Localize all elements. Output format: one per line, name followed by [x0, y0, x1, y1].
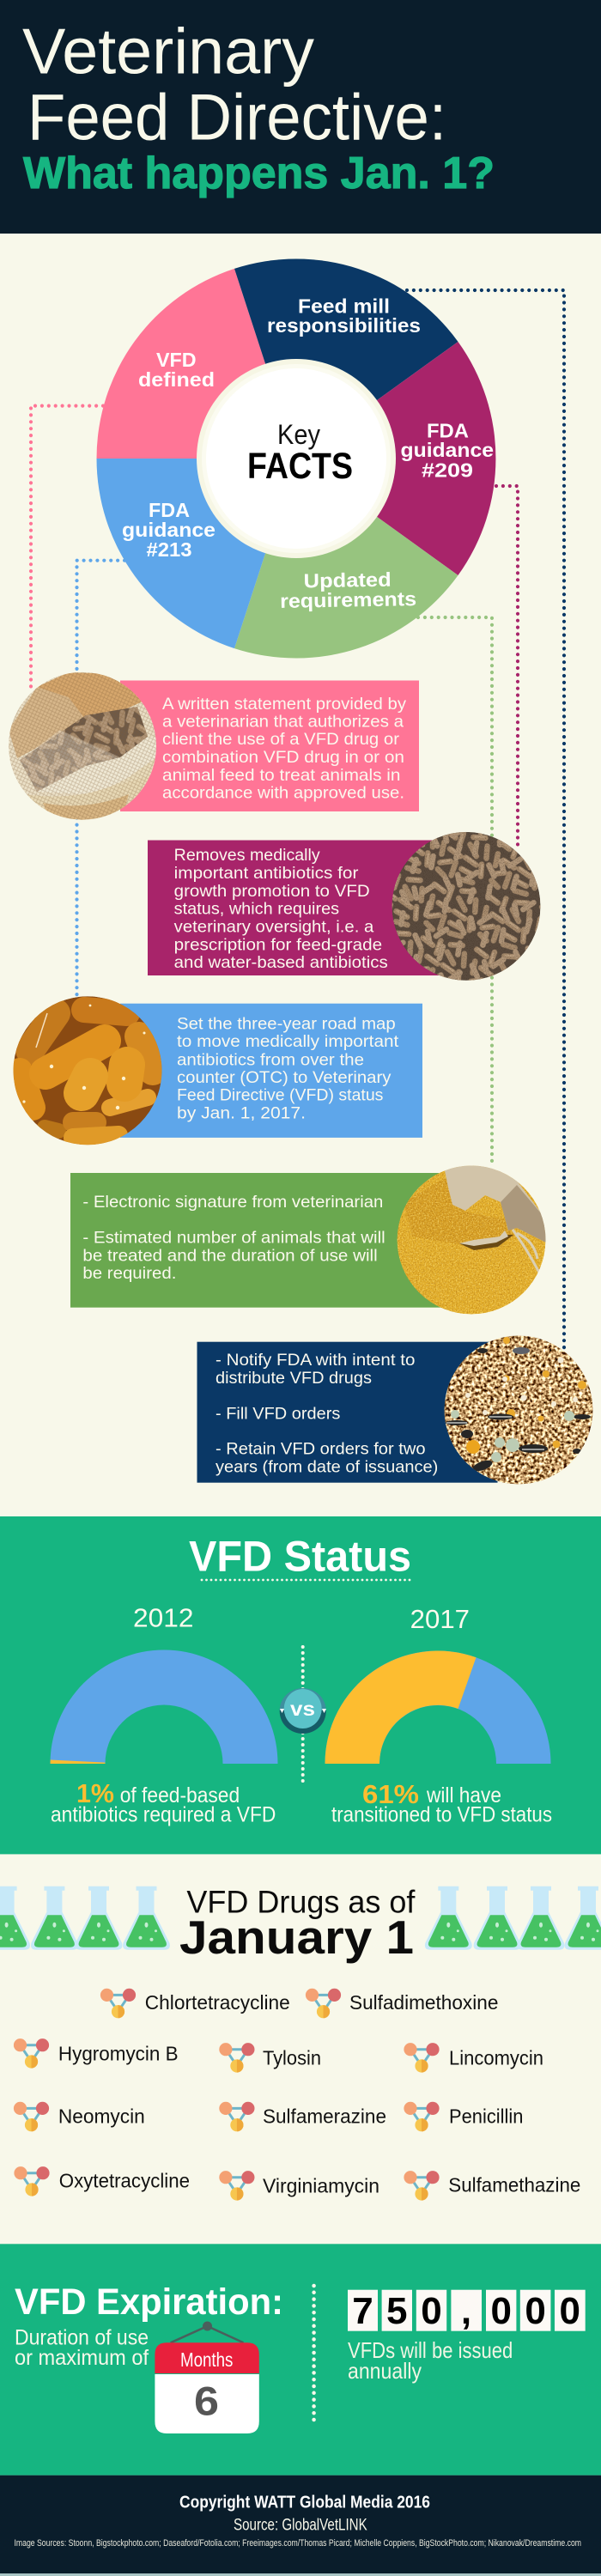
text: guidance 213 description: Feed Directive (VFD) status: [177, 1086, 384, 1105]
title: Feed Directive:: [27, 82, 446, 155]
label: 2012: 2012: [133, 1602, 194, 1632]
segment: feed mill responsibilities: [234, 258, 458, 459]
drug: Chlortetracycline: Chlortetracycline: [145, 1991, 290, 2014]
heading: VFD drugs as of January 1: January 1: [179, 1911, 414, 1964]
drug: Virginiamycin: [219, 2171, 379, 2201]
text: guidance 209 description: and water-based antibiotics: [174, 953, 388, 972]
panel: FDA guidance 213: [14, 996, 422, 1145]
caption: 2017: will have: [426, 1783, 501, 1807]
drug: Tylosin: Tylosin: [263, 2046, 321, 2069]
text: guidance 209 description: veterinary oversight, i.e. a: [174, 917, 373, 936]
caption: 2012: antibiotics required a VFD: [51, 1803, 276, 1827]
label: 2017: 2017: [410, 1604, 470, 1634]
chart: key facts donut: [96, 258, 495, 659]
text: VFD definition: animal feed to treat animals in: [162, 766, 400, 785]
panel: VFD expiration: [0, 2244, 601, 2476]
photo: burlap sack of pellets: [9, 672, 159, 824]
chart: 2012 half donut: [50, 1650, 278, 1764]
caption: 2012: [51, 1778, 276, 1827]
connector: navy dotted line: [407, 290, 564, 1348]
title: [22, 15, 446, 155]
connector: blue dotted line: [77, 561, 124, 996]
text: duration: [15, 2326, 149, 2370]
heading: VFD Status: VFD Status: [189, 1532, 411, 1580]
text: guidance 213 description: antibiotics from over the: [177, 1050, 364, 1069]
text: guidance 213 description: Set the three-year road map: [177, 1015, 396, 1034]
segment: VFD defined: [96, 269, 296, 459]
counter: 750,000: 0: [525, 2290, 546, 2332]
segment: FDA guidance 209: FDA: [427, 419, 469, 441]
text: guidance 209 description: important antibiotics for: [174, 864, 359, 883]
drug: Chlortetracycline: [100, 1989, 290, 2018]
drug: Lincomycin: Lincomycin: [449, 2046, 543, 2069]
heading: VFD drugs as of January 1: [179, 1884, 416, 1964]
chart: 2017 half donut: [325, 1650, 551, 1764]
drug: Penicillin: Penicillin: [449, 2105, 523, 2128]
panel: VFD status: [0, 1516, 601, 1854]
text: guidance 213 description: by Jan. 1, 2017.: [177, 1103, 306, 1122]
connector: pink dotted line: [31, 406, 103, 689]
segment: VFD defined: VFD: [156, 349, 197, 371]
text: guidance 213 description: to move medically important: [177, 1032, 399, 1051]
text: source: Source: GlobalVetLINK: [234, 2517, 367, 2535]
drug: Virginiamycin: Virginiamycin: [263, 2174, 379, 2196]
text: guidance 209 description: status, which requires: [174, 900, 339, 919]
segment: FDA guidance 213: #213: [146, 538, 192, 561]
text: guidance 209 description: prescription for feed-grade: [174, 935, 382, 954]
counter: 750,000: [348, 2290, 586, 2332]
drug: Hygromycin B: Hygromycin B: [58, 2042, 179, 2064]
panel: footer: [0, 2476, 601, 2576]
segment: FDA guidance 213: guidance: [122, 519, 216, 541]
heading: VFD Expiration: VFD Expiration:: [15, 2281, 283, 2323]
text: updated requirements list: [82, 1193, 385, 1283]
text: guidance 213 description: [177, 1015, 399, 1122]
icon: vs badge: vs: [290, 1698, 315, 1720]
caption: 2017: [331, 1779, 552, 1827]
icons: flasks left: [0, 1886, 170, 1950]
panel: feed mill responsibilities: [197, 1336, 592, 1484]
segment: updated requirements: [234, 459, 458, 659]
drug: Sulfamethazine: [404, 2171, 580, 2201]
drug: Oxytetracycline: [14, 2166, 190, 2196]
segment: updated requirements: Updated: [303, 568, 392, 592]
text: responsibilities list: [216, 1351, 438, 1477]
text: guidance 209 description: growth promotion to VFD: [174, 882, 370, 901]
segment: updated requirements: requirements: [280, 587, 416, 612]
subtitle: What happens Jan. 1?: [23, 149, 495, 198]
center label: key facts: FACTS: [247, 446, 353, 487]
text: responsibilities list: - Notify FDA with intent to: [216, 1351, 416, 1370]
counter: 750,000: 0: [421, 2290, 442, 2332]
photo: orange capsules: [14, 996, 161, 1145]
segment: FDA guidance 209: #209: [422, 459, 473, 482]
text: duration: Duration of use: [15, 2326, 149, 2350]
segment: FDA guidance 213: [96, 459, 296, 648]
icon: calendar 6 months: [155, 2322, 259, 2433]
icon: vs badge: [280, 1688, 326, 1734]
text: guidance 213 description: counter (OTC) to Veterinary: [177, 1068, 392, 1087]
drug: Sulfadimethoxine: [306, 1989, 498, 2018]
text: VFD definition: accordance with approved use.: [162, 783, 404, 802]
section: VFD drugs: [0, 1884, 601, 2201]
segment: VFD defined: defined: [138, 368, 215, 391]
text: copyright: Copyright WATT Global Media 2016: [179, 2494, 430, 2512]
heading: VFD drugs as of January 1: VFD Drugs as of: [186, 1884, 416, 1919]
panel: VFD defined: [9, 672, 419, 824]
drug: Tylosin: [219, 2043, 321, 2073]
text: updated requirements list: - Electronic signature from veterinarian: [82, 1193, 383, 1212]
panel: header: [0, 0, 601, 234]
counter: 750,000: 7: [352, 2290, 373, 2332]
counter: 750,000: 0: [490, 2290, 512, 2332]
segment: feed mill responsibilities: Feed mill: [298, 295, 390, 318]
text: responsibilities list: distribute VFD drugs: [216, 1369, 372, 1388]
icon: calendar 6 months: 6: [194, 2379, 219, 2424]
panel: FDA guidance 209: [148, 832, 541, 981]
text: responsibilities list: - Fill VFD orders: [216, 1404, 341, 1423]
text: guidance 209 description: [174, 846, 388, 972]
icons: flasks right: [425, 1886, 601, 1950]
text: updated requirements list: - Estimated number of animals that will: [82, 1228, 385, 1247]
segment: FDA guidance 209: [296, 342, 495, 575]
drug: Sulfamerazine: Sulfamerazine: [263, 2105, 386, 2128]
caption: 2012: 1%: [76, 1778, 114, 1808]
drug: Oxytetracycline: Oxytetracycline: [59, 2170, 190, 2192]
icon: calendar 6 months: Months: [180, 2348, 233, 2371]
segment: FDA guidance 209: guidance: [400, 439, 494, 461]
segment: FDA guidance 213: FDA: [149, 499, 190, 521]
photo: yellow cornmeal and sack: [397, 1163, 546, 1314]
text: VFDs issued annually: annually: [348, 2358, 422, 2384]
text: updated requirements list: be treated and the duration of use will: [82, 1246, 378, 1265]
drug: Sulfamerazine: [219, 2102, 386, 2131]
drug: Penicillin: [404, 2102, 523, 2131]
text: VFD definition: combination VFD drug in or on: [162, 748, 404, 767]
center label: key facts: Key: [277, 419, 320, 450]
drug: Sulfamethazine: Sulfamethazine: [448, 2174, 580, 2196]
segment: feed mill responsibilities: responsibilities: [267, 314, 421, 337]
text: guidance 209 description: Removes medically: [174, 846, 320, 865]
counter: 750,000: ,: [461, 2290, 471, 2332]
text: VFD definition: [162, 695, 406, 802]
text: VFD definition: a veterinarian that authorizes a: [162, 713, 404, 732]
drug: Sulfadimethoxine: Sulfadimethoxine: [349, 1991, 498, 2014]
text: updated requirements list: be required.: [82, 1264, 176, 1283]
text: VFDs issued annually: VFDs will be issued: [348, 2337, 513, 2363]
connector: purple dotted line: [496, 486, 518, 851]
text: VFDs issued annually: [348, 2337, 513, 2384]
panel: updated requirements: [70, 1163, 546, 1314]
counter: 750,000: 5: [386, 2290, 408, 2332]
title: Veterinary: [22, 15, 314, 88]
drug: Hygromycin B: [14, 2038, 179, 2069]
drug: Neomycin: Neomycin: [58, 2105, 145, 2128]
drug: Lincomycin: [404, 2043, 543, 2073]
counter: 750,000: 0: [560, 2290, 580, 2332]
photo: mixed grain: [445, 1336, 592, 1484]
text: VFD definition: client the use of a VFD drug or: [162, 730, 400, 749]
photo: brown feed pellets: [392, 832, 541, 981]
text: responsibilities list: years (from date of issuance): [216, 1458, 438, 1477]
text: responsibilities list: - Retain VFD orders for two: [216, 1440, 426, 1459]
connector: green dotted line: [418, 617, 492, 1166]
caption: 2017: 61%: [362, 1779, 419, 1809]
caption: 2017: transitioned to VFD status: [331, 1803, 552, 1827]
caption: 2012: of feed-based: [120, 1783, 240, 1807]
drug: Neomycin: [14, 2102, 145, 2131]
text: duration: or maximum of: [15, 2346, 149, 2370]
text: VFD definition: A written statement provided by: [162, 695, 406, 714]
center label: key facts: [197, 359, 396, 558]
